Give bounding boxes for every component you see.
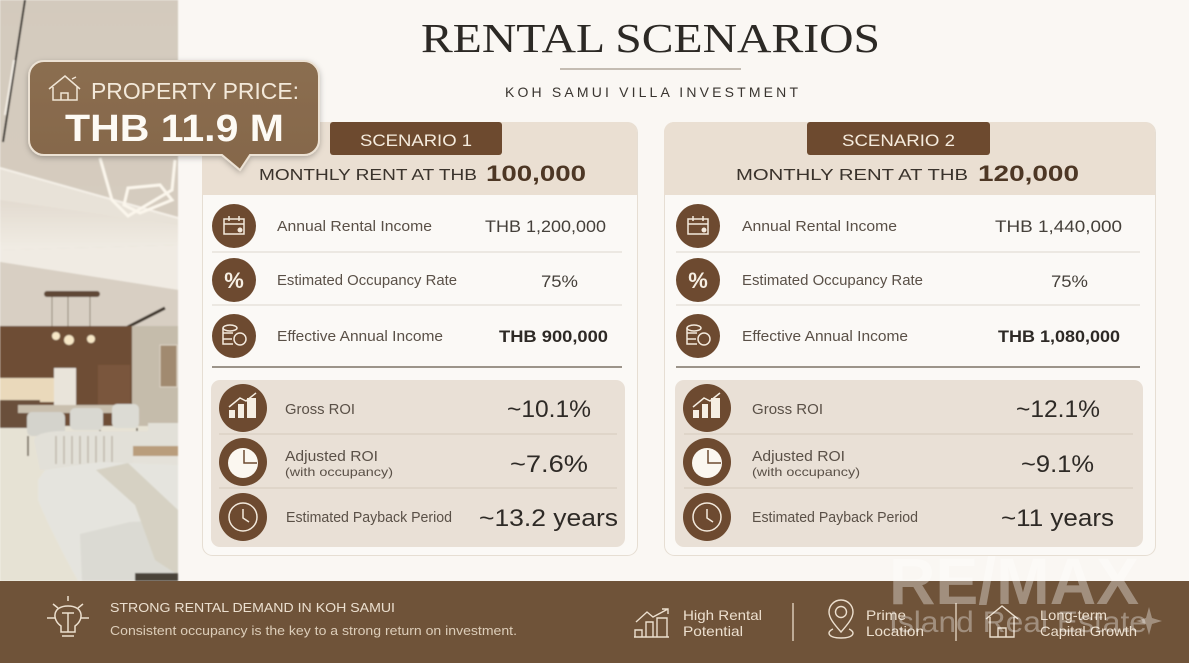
scenario 1 monthly rent heading: MONTHLY RENT AT THB (259, 167, 477, 184)
icon: home (986, 606, 1018, 637)
row: occupancy rate: Estimated Occupancy Rate (277, 273, 457, 289)
icon: light bulb (47, 596, 89, 636)
panel: scenario 1: 100,000 (486, 161, 586, 186)
dining chairs (18, 405, 130, 413)
icon: location pin (829, 600, 853, 638)
gross ROI (683, 384, 1100, 432)
row: annual rental income: THB 1,440,000 (995, 217, 1122, 236)
footer message: Consistent occupancy is the key to a strong return on investment. (110, 623, 517, 638)
high rental potential: Potential (683, 623, 743, 639)
adjusted ROI: Adjusted ROI (285, 449, 378, 465)
icon: house (49, 76, 80, 100)
adjusted ROI: (with occupancy) (285, 465, 393, 479)
scenario 2 monthly rent heading: MONTHLY RENT AT THB (736, 167, 968, 184)
scenario 1 header band (202, 122, 637, 195)
high rental potential: High Rental (683, 607, 762, 623)
row: annual rental income: Annual Rental Income (277, 219, 432, 235)
high rental potential (683, 607, 762, 639)
gross ROI (219, 384, 591, 432)
prime location: Prime (866, 607, 906, 623)
row: occupancy rate (212, 258, 578, 302)
long-term capital growth (1040, 607, 1137, 639)
row: annual rental income (212, 204, 606, 248)
row: annual rental income: THB 1,200,000 (485, 217, 606, 236)
title: RENTAL SCENARIOS (421, 15, 880, 61)
ceiling planes (0, 168, 178, 240)
sofa seat (38, 462, 178, 581)
floor (0, 426, 178, 581)
row: effective annual income: Effective Annual Income (742, 329, 908, 345)
long-term capital growth: Long-term (1040, 607, 1107, 623)
adjusted ROI (219, 438, 588, 486)
row: occupancy rate: % (224, 268, 244, 293)
payback period: ~13.2 years (479, 505, 618, 532)
ROI panel (211, 380, 625, 547)
adjusted ROI: Adjusted ROI (752, 449, 845, 465)
payback period: Estimated Payback Period (752, 510, 918, 526)
subtitle: KOH SAMUI VILLA INVESTMENT (505, 84, 798, 100)
panel: scenario 2 (664, 122, 1156, 556)
row: occupancy rate: Estimated Occupancy Rate (742, 273, 923, 289)
panel: scenario 2: 120,000 (978, 161, 1079, 186)
adjusted ROI: (with occupancy) (752, 465, 860, 479)
watermark: RE/MAX Island Real Estate: Island Real Estate (889, 606, 1147, 639)
payback period (683, 493, 1114, 541)
callout: property price (29, 61, 319, 170)
scenario 1 tab: SCENARIO 1 (360, 132, 472, 150)
row: occupancy rate: 75% (541, 272, 578, 291)
row: effective annual income (676, 314, 1120, 358)
row: effective annual income: THB 900,000 (499, 327, 608, 346)
row: occupancy rate: 75% (1051, 272, 1088, 291)
row: annual rental income: Annual Rental Income (742, 219, 897, 235)
payback period (219, 493, 618, 541)
sofa back (34, 423, 178, 470)
adjusted ROI: ~7.6% (510, 451, 588, 478)
gross ROI: Gross ROI (752, 402, 823, 418)
row: effective annual income: Effective Annual Income (277, 329, 443, 345)
scenario 1 tab (330, 122, 502, 155)
long-term capital growth: Capital Growth (1040, 623, 1137, 639)
footer headline: STRONG RENTAL DEMAND IN KOH SAMUI (110, 600, 395, 615)
wood wall (0, 326, 132, 426)
footer bar (0, 581, 1189, 663)
watermark: RE/MAX Island Real Estate: RE/MAX (889, 544, 1139, 618)
payback period: Estimated Payback Period (286, 510, 452, 526)
scenario 2 tab: SCENARIO 2 (842, 132, 955, 150)
prime location (866, 607, 924, 639)
gross ROI: Gross ROI (285, 402, 355, 418)
row: effective annual income (212, 314, 608, 358)
callout: property price: PROPERTY PRICE: (91, 78, 299, 104)
prime location: Location (866, 623, 924, 639)
panel: scenario 1 (202, 122, 638, 556)
gross ROI: ~12.1% (1016, 396, 1100, 423)
scenario 2 header band (664, 122, 1155, 195)
row: effective annual income: THB 1,080,000 (998, 327, 1120, 346)
row: occupancy rate (676, 258, 1088, 302)
row: occupancy rate: % (688, 268, 708, 293)
payback period: ~11 years (1001, 505, 1114, 532)
gross ROI: ~10.1% (507, 396, 591, 423)
icon: growth chart (634, 609, 669, 637)
callout: property price: THB 11.9 M (65, 108, 284, 150)
adjusted ROI: ~9.1% (1021, 451, 1094, 478)
row: annual rental income (676, 204, 1122, 248)
adjusted ROI (683, 438, 1094, 486)
scenario 2 tab (807, 122, 990, 155)
photo: villa interior (0, 0, 178, 581)
ROI panel (675, 380, 1143, 547)
